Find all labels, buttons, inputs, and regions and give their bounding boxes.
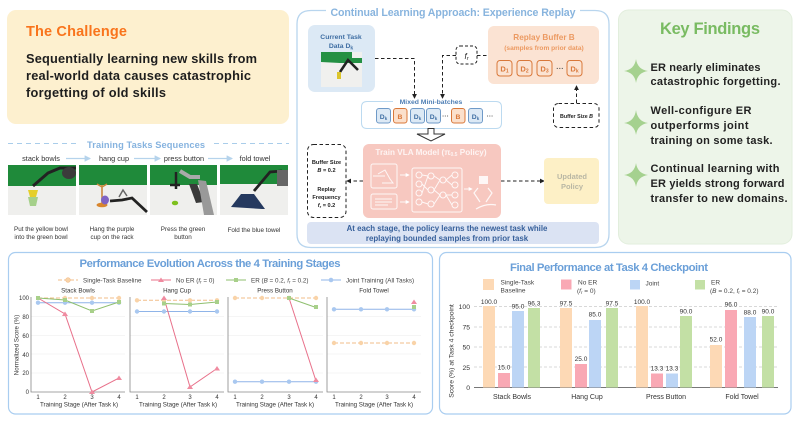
line chart legend: Joint Training (All Tasks)	[346, 278, 414, 284]
bar chart legend: r	[581, 290, 583, 295]
challenge statement: Sequentially learning new skills from	[26, 51, 257, 66]
chart: fold towel: 4	[412, 395, 416, 401]
chart: press button: Training Stage (After Task k)	[236, 402, 314, 408]
task captions: Fold the blue towel	[228, 227, 280, 234]
mixed mini-batches: D	[380, 114, 385, 121]
train VLA model: Policy)	[457, 148, 487, 157]
line chart legend	[58, 278, 414, 284]
bar chart axes	[448, 304, 778, 398]
panel: key findings	[618, 10, 792, 244]
settings box: Buffer Size	[312, 160, 341, 166]
finding 3: ER yields strong forward	[650, 178, 784, 190]
photo: fold towel	[220, 165, 288, 215]
chart: stack bowls: 80	[22, 315, 30, 321]
buffer size box	[554, 104, 599, 128]
panel: training task sequences	[8, 140, 289, 241]
mixed mini-batches: B	[456, 114, 461, 121]
replay buffer: D	[540, 64, 546, 74]
stage banner: replaying bounded samples from prior task	[366, 234, 529, 243]
bars: hang cup: 97.5	[560, 300, 573, 308]
mixed mini-batches: D	[430, 114, 435, 121]
chart: fold towel: 3	[385, 395, 389, 401]
bars: press button: 100.0	[634, 299, 651, 306]
panel: continual learning approach	[297, 7, 609, 248]
bars: fold towel: 88.0	[744, 310, 757, 316]
photo: stack bowls	[8, 165, 76, 215]
dashed data-flow arrows	[347, 56, 576, 181]
replay buffer: 3	[546, 68, 549, 74]
replay buffer: 1	[506, 68, 509, 74]
mixed mini-batches: k	[419, 116, 422, 121]
bars: stack bowls: 96.3	[528, 300, 541, 308]
settings box: B = 0.2	[317, 168, 336, 174]
bars: stack bowls: 100.0	[481, 299, 498, 306]
train VLA model	[363, 144, 501, 218]
heading: key findings: Key Findings	[660, 20, 760, 38]
replay buffer: 2	[526, 68, 529, 74]
chart: press button: 3	[287, 395, 291, 401]
panel: performance evolution	[8, 252, 432, 414]
bar chart legend: Single-Task	[500, 280, 535, 286]
current task data	[308, 25, 375, 92]
bars: stack bowls	[481, 299, 541, 401]
bar chart legend: r	[738, 290, 740, 295]
chart: hang cup: 2	[162, 395, 166, 401]
finding 1	[624, 59, 780, 88]
bar chart axes: 25	[462, 365, 470, 372]
replay buffer	[488, 26, 599, 84]
replay buffer: ···	[556, 64, 564, 73]
chart: hang cup: Training Stage (After Task k)	[139, 402, 217, 408]
task captions: Press the green	[161, 226, 206, 233]
mixed mini-batches: B	[398, 114, 403, 121]
finding 1: catastrophic forgetting.	[650, 76, 780, 88]
task captions	[14, 226, 280, 241]
panel: the challenge	[7, 10, 289, 124]
bars: hang cup: Hang Cup	[571, 394, 603, 401]
bars: fold towel: 96.0	[725, 302, 738, 308]
mixed mini-batches: k	[385, 116, 388, 121]
panel: final performance	[440, 252, 791, 414]
bar chart legend: = 0)	[582, 288, 596, 295]
settings box: = 0.2	[321, 203, 335, 209]
buffer size box: Buffer Size B	[560, 114, 593, 120]
chart: hang cup: 4	[215, 395, 219, 401]
line chart legend: = 0.2)	[290, 278, 309, 284]
task names and arrows: stack bowls	[22, 154, 60, 163]
bar chart legend: = 0.2)	[740, 288, 758, 295]
bars: press button: Press Button	[646, 394, 686, 401]
task captions: button	[174, 234, 192, 241]
task captions: Hang the purple	[90, 226, 135, 233]
chart: hang cup: Hang Cup	[163, 288, 191, 294]
bars: hang cup	[560, 300, 619, 401]
bars: fold towel: 90.0	[762, 308, 775, 316]
bars: press button	[634, 299, 693, 401]
chart: stack bowls: Normalized Score (%)	[14, 315, 20, 375]
line chart legend: No ER (f	[176, 278, 200, 284]
chart: stack bowls	[14, 288, 125, 408]
bar chart legend: Baseline	[500, 288, 526, 294]
bars: stack bowls: 15.0	[498, 364, 511, 372]
bars: press button: 90.0	[680, 308, 693, 316]
bars: hang cup: 85.0	[589, 312, 602, 318]
chart: hang cup: 1	[135, 395, 139, 401]
chart: press button: 1	[233, 395, 237, 401]
line chart legend: = 0)	[202, 278, 214, 284]
chart: stack bowls: 3	[90, 395, 94, 401]
updated policy: Policy	[561, 182, 584, 191]
train VLA model: Train VLA Model (π	[375, 148, 451, 157]
heading: performance evolution: Performance Evolution Across the 4 Training Stages	[80, 258, 340, 270]
chart: press button	[228, 288, 323, 408]
finding 3: transfer to new domains.	[650, 193, 788, 205]
current task data: k	[350, 46, 353, 52]
chart: hang cup: 3	[188, 395, 192, 401]
bar chart legend: ER	[711, 280, 720, 286]
replay buffer: D	[500, 64, 506, 74]
current task data: Data D	[329, 43, 350, 50]
updated policy	[544, 158, 599, 204]
bar chart legend: No ER	[578, 280, 597, 286]
heading: the challenge: The Challenge	[26, 24, 127, 40]
chart: stack bowls: Training Stage (After Task k)	[40, 402, 118, 408]
task names and arrows: press button	[164, 154, 204, 163]
heading: final performance: Final Performance at Task 4 Checkpoint	[510, 262, 708, 274]
line chart legend: r	[289, 280, 291, 284]
bar chart axes: 50	[462, 344, 470, 352]
mixed mini-batches: k	[477, 116, 480, 121]
task captions: into the green bowl	[14, 234, 68, 241]
bars: press button: 13.3	[666, 366, 679, 372]
heading: training tasks: Training Tasks Sequences	[87, 140, 205, 150]
chart: fold towel: 1	[332, 395, 336, 401]
chart: fold towel: Fold Towel	[359, 288, 389, 294]
finding 3: Continual learning with	[650, 163, 780, 175]
stage banner	[307, 222, 599, 244]
chart: press button: 2	[260, 395, 264, 401]
bar chart axes: 100	[459, 304, 470, 311]
line chart legend: Single-Task Baseline	[83, 278, 142, 284]
bar chart axes: 0	[466, 385, 470, 392]
chart: fold towel: 2	[359, 395, 363, 401]
hollow down arrow	[417, 128, 445, 141]
finding 2: training on some task.	[650, 135, 772, 147]
updated policy: Updated	[557, 172, 587, 181]
task names and arrows	[22, 154, 271, 163]
settings box: f	[318, 203, 321, 209]
mixed mini-batches: ···	[442, 113, 449, 120]
chart: stack bowls: 4	[117, 395, 121, 401]
stage banner: At each stage, the policy learns the newest task while	[347, 224, 548, 233]
chart: press button: 4	[314, 395, 318, 401]
bars: stack bowls: 95.0	[512, 304, 525, 310]
challenge statement	[26, 51, 257, 100]
chart: fold towel	[327, 288, 421, 408]
chart: press button: Press Button	[257, 288, 293, 294]
bars: press button: 13.3	[651, 366, 664, 372]
bars: fold towel: Fold Towel	[725, 394, 759, 401]
finding 1: ER nearly eliminates	[650, 62, 760, 74]
chart: stack bowls: 60	[22, 334, 30, 340]
bars: hang cup: 97.5	[606, 300, 619, 308]
bar chart legend: (B = 0.2, f	[710, 288, 738, 295]
bar chart axes: Score (%) at Task 4 checkpoint	[448, 304, 456, 398]
replay frequency box: f	[464, 52, 467, 61]
mixed mini-batches: k	[435, 116, 438, 121]
line chart legend: r	[200, 280, 202, 284]
mixed mini-batches: D	[414, 114, 419, 121]
replay buffer: D	[570, 64, 576, 74]
replay buffer: Replay Buffer B	[513, 33, 575, 42]
chart: stack bowls: 0	[26, 390, 30, 396]
chart: fold towel: Training Stage (After Task k)	[335, 402, 413, 408]
task captions: Put the yellow bowl	[14, 226, 68, 233]
replay buffer: D	[520, 64, 526, 74]
mixed mini-batches	[362, 99, 502, 128]
bar chart legend: (f	[577, 288, 581, 295]
mixed mini-batches: Mixed Mini-batches	[400, 99, 463, 106]
task captions: cup on the rack	[90, 234, 134, 241]
replay buffer: k	[576, 68, 579, 74]
chart: stack bowls: 2	[63, 395, 67, 401]
finding 2: outperforms joint	[650, 120, 749, 132]
chart: stack bowls: 20	[22, 371, 30, 377]
replay frequency box: r	[467, 56, 470, 62]
line chart legend: ER (B = 0.2, f	[251, 278, 289, 284]
replay buffer: (samples from prior data)	[504, 45, 584, 52]
mixed mini-batches: ···	[487, 113, 493, 120]
replay frequency box	[456, 46, 477, 64]
finding 3	[624, 163, 788, 205]
settings box	[308, 144, 346, 218]
chart: hang cup	[130, 288, 224, 408]
bar chart axes: 75	[462, 324, 470, 332]
challenge statement: forgetting of old skills	[26, 85, 166, 100]
heading: approach: Continual Learning Approach: Experience Replay	[330, 7, 576, 19]
finding 2	[624, 105, 772, 147]
bar chart legend: Joint	[646, 280, 659, 288]
settings box: Frequency	[312, 195, 342, 201]
current task data: Current Task	[320, 34, 362, 41]
bars: fold towel	[710, 302, 775, 401]
chart: stack bowls: 100	[19, 296, 30, 302]
chart: stack bowls: Stack Bowls	[61, 288, 95, 294]
task names and arrows: fold towel	[240, 154, 271, 163]
chart: stack bowls: 40	[22, 353, 30, 359]
settings box: Replay	[317, 187, 337, 193]
bars: hang cup: 25.0	[575, 356, 588, 363]
settings box: r	[320, 204, 322, 209]
photo: hang cup	[79, 165, 147, 215]
finding 2: Well-configure ER	[650, 105, 752, 117]
network diagram	[371, 164, 496, 212]
task names and arrows: hang cup	[99, 154, 129, 163]
bar chart legend	[483, 279, 758, 295]
bars: fold towel: 52.0	[710, 336, 723, 344]
bars: stack bowls: Stack Bowls	[493, 394, 532, 401]
mixed mini-batches: D	[472, 114, 477, 121]
challenge statement: real-world data causes catastrophic	[26, 68, 251, 83]
chart: stack bowls: 1	[36, 395, 40, 401]
photo: press button	[150, 165, 217, 215]
train VLA model: 0.5	[451, 152, 458, 158]
